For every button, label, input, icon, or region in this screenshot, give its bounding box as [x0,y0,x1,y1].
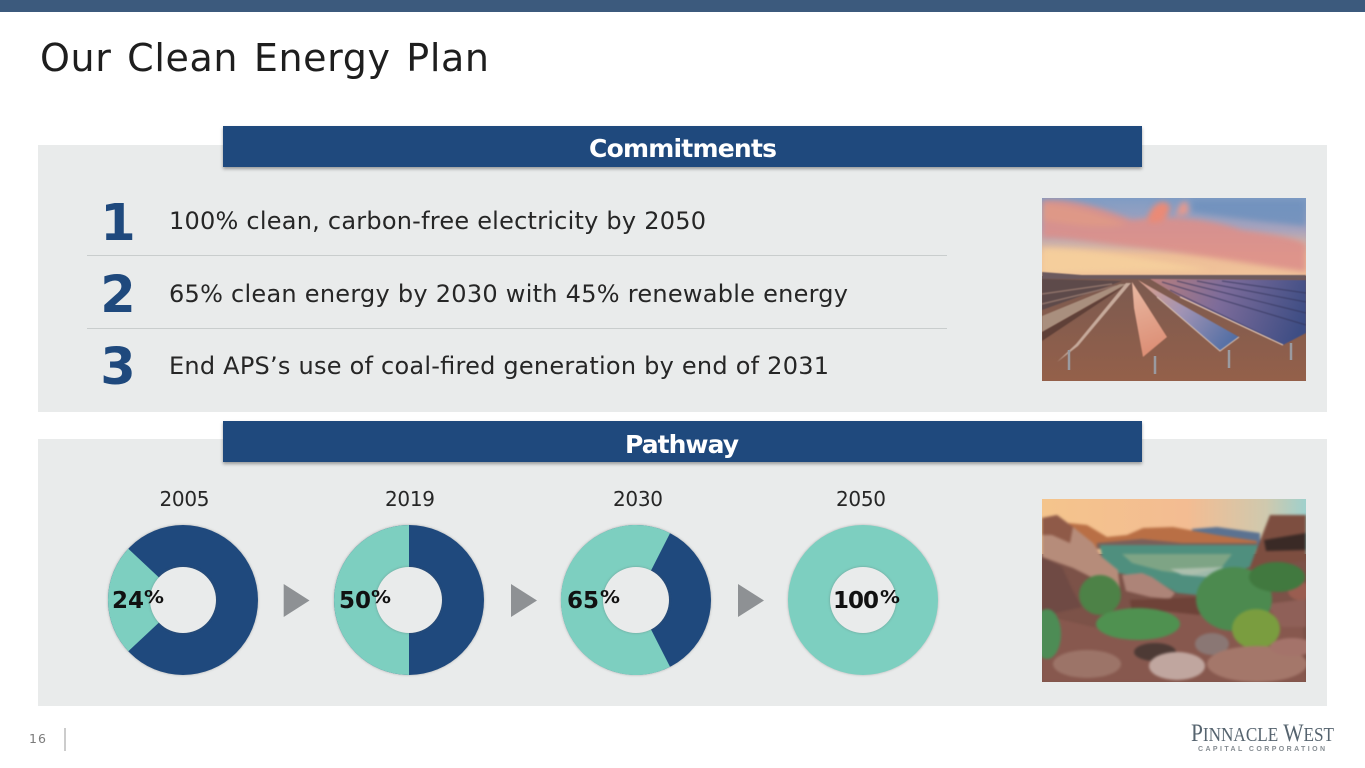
donut chart 2005: 24%: 24 [112,588,144,614]
year label 2030: 2030 [613,487,663,511]
donut chart 2019: 50% [334,525,484,675]
heading: commitments: Commitments [589,134,777,163]
commitment 2: 2 [100,266,136,325]
mid rocks [1122,573,1175,599]
rocks [1134,643,1176,661]
commitment 1 [100,194,706,253]
logo: Pinnacle West Capital Corporation: PINNACLE WEST [1191,720,1334,747]
commitment 3 [100,338,829,397]
donut chart 2050: 100%: 100 [833,588,879,614]
donut chart 2005: 24% [108,525,258,675]
distant mountains [1192,527,1260,549]
commitment 3: 3 [100,338,136,397]
left dark array [1042,279,1122,310]
arrow 3 [738,584,764,617]
commitment 1: 1 [100,194,136,253]
dark mid rocks [1130,597,1203,615]
left panel row [1057,283,1131,362]
donut chart 2050: 100% [788,525,938,675]
panel: commitments [38,126,1327,412]
year label 2050: 2050 [836,487,886,511]
photo: desert mountain valley [1033,499,1314,682]
donut chart 2030: 65%: 65 [567,588,599,614]
commitment 3: End APS’s use of coal-fired generation by end of 2031 [169,352,829,380]
donut chart 2019: 50%: 50 [339,588,371,614]
donut chart 2005: 24%: % [144,587,164,608]
arrow 1 [284,584,310,617]
donut chart 2030: 65%: % [600,587,620,608]
commitment 2: 65% clean energy by 2030 with 45% renewable energy [169,280,848,308]
donut chart 2030: 65% [561,525,711,675]
panel supports [1069,343,1291,374]
arrow 2 [511,584,537,617]
donut chart 2050: 100%: % [880,587,900,608]
heading: commitments [223,126,1142,167]
year label 2019: 2019 [385,487,435,511]
vegetation [1079,575,1121,615]
donut chart 2019: 50%: % [371,587,391,608]
title: Our Clean Energy Plan [40,36,489,80]
right field [1150,279,1306,345]
logo: Pinnacle West Capital Corporation: CAPITAL CORPORATION [1198,746,1325,753]
commitment 2 [100,266,848,325]
left cliff [1042,527,1120,588]
panel: pathway [38,421,1327,706]
page number: 16 [29,731,47,746]
heading: pathway [223,421,1142,462]
right cliff [1253,513,1306,562]
top header bar [0,0,1365,12]
photo: solar field at sunset [1042,198,1306,381]
commitment 1: 100% clean, carbon-free electricity by 2050 [169,207,706,235]
year label 2005: 2005 [160,487,210,511]
heading: pathway: Pathway [625,430,739,459]
green city valley [1100,545,1258,595]
blue row [1138,280,1239,351]
bright central row [1132,282,1167,357]
